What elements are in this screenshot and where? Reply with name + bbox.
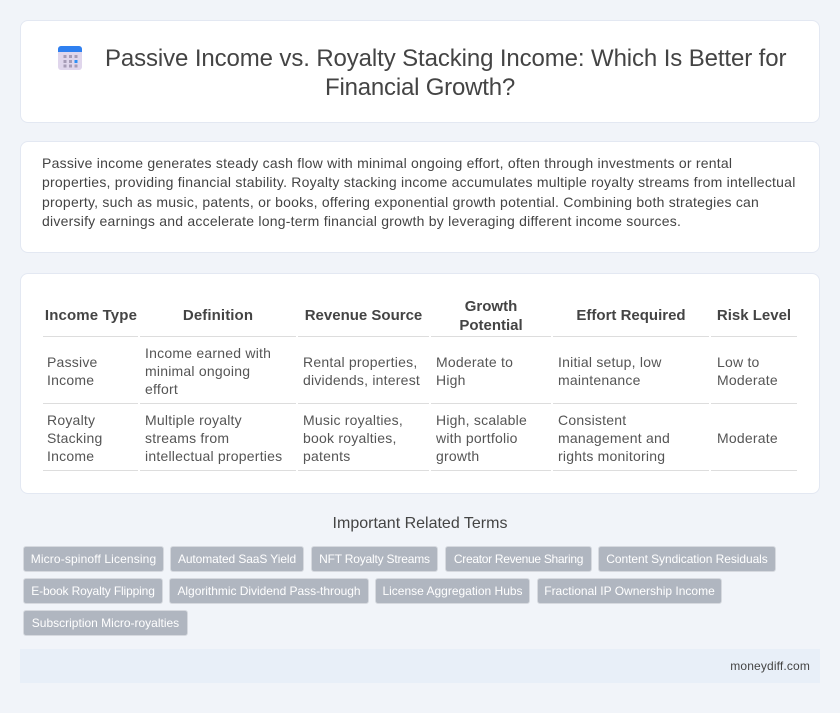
table header: Effort Required	[576, 307, 686, 324]
tag: Subscription Micro-royalties	[32, 616, 179, 630]
intro paragraph: property, such as music, patents, or books, offering exponential growth potential. Combining both strategies can	[42, 194, 759, 210]
row: royalty stacking income: intellectual properties	[145, 448, 282, 464]
row: passive income: Passive	[47, 354, 98, 370]
tag	[598, 546, 776, 572]
tag: Fractional IP Ownership Income	[544, 584, 715, 598]
intro paragraph	[42, 155, 796, 229]
row: royalty stacking income: High, scalable	[436, 412, 527, 428]
row: passive income: Low to	[717, 354, 760, 370]
tag	[23, 578, 163, 604]
row: royalty stacking income: Royalty	[47, 412, 95, 428]
row: royalty stacking income: Music royalties,	[303, 412, 403, 428]
row: passive income: Moderate	[717, 372, 778, 388]
row: royalty stacking income: Income	[47, 448, 94, 464]
intro paragraph: Passive income generates steady cash flow with minimal ongoing effort, often through investments or rental	[42, 155, 732, 171]
footer bar	[20, 649, 820, 683]
row: royalty stacking income: Multiple royalty	[145, 412, 242, 428]
related terms heading: Important Related Terms	[333, 515, 507, 532]
row: passive income: High	[436, 372, 466, 388]
icon: calendar	[58, 46, 82, 70]
tag	[23, 610, 188, 636]
tag	[445, 546, 592, 572]
title: Financial Growth?	[325, 74, 515, 101]
row: royalty stacking income	[47, 412, 778, 464]
row: royalty stacking income: streams from	[145, 430, 229, 446]
title card	[20, 20, 820, 123]
row: royalty stacking income: rights monitoring	[558, 448, 665, 464]
row: passive income: Moderate to	[436, 354, 513, 370]
tag: Creator Revenue Sharing	[454, 552, 583, 566]
tag: License Aggregation Hubs	[382, 584, 523, 598]
title	[105, 45, 786, 101]
tag	[169, 578, 369, 604]
row: passive income: maintenance	[558, 372, 641, 388]
row: royalty stacking income: Stacking	[47, 430, 102, 446]
table header	[45, 298, 791, 334]
row: royalty stacking income: book royalties,	[303, 430, 397, 446]
tag	[23, 546, 164, 572]
table header: Income Type	[45, 307, 137, 324]
row: royalty stacking income: management and	[558, 430, 670, 446]
tag: E-book Royalty Flipping	[31, 584, 155, 598]
tag: Content Syndication Residuals	[606, 552, 768, 566]
row: royalty stacking income: with portfolio	[436, 430, 518, 446]
comparison table card	[20, 273, 820, 494]
row: passive income: effort	[145, 381, 178, 397]
tag: Micro-spinoff Licensing	[31, 552, 156, 566]
intro paragraph: properties, providing financial stability. Royalty stacking income accumulates multiple royalty streams from intellectual	[42, 174, 796, 190]
row: royalty stacking income: Consistent	[558, 412, 626, 428]
row: royalty stacking income: growth	[436, 448, 479, 464]
row: passive income	[47, 345, 778, 397]
table header: Revenue Source	[305, 307, 422, 324]
tag	[537, 578, 722, 604]
row: passive income: dividends, interest	[303, 372, 420, 388]
footer source: moneydiff.com	[730, 659, 810, 673]
title: Passive Income vs. Royalty Stacking Income: Which Is Better for	[105, 45, 786, 72]
tag	[375, 578, 530, 604]
row: royalty stacking income: Moderate	[717, 430, 778, 446]
table header: Growth	[465, 298, 517, 315]
row: passive income: Rental properties,	[303, 354, 417, 370]
table header: Potential	[459, 317, 523, 334]
related terms tags	[23, 546, 776, 636]
tag: Automated SaaS Yield	[178, 552, 296, 566]
row: passive income: Initial setup, low	[558, 354, 662, 370]
tag	[311, 546, 438, 572]
intro text card	[20, 141, 820, 253]
tag	[170, 546, 304, 572]
tag: Algorithmic Dividend Pass-through	[177, 584, 361, 598]
table header: Risk Level	[717, 307, 791, 324]
row: passive income: Income earned with	[145, 345, 271, 361]
tag: NFT Royalty Streams	[319, 552, 430, 566]
intro paragraph: diversify earnings and accelerate long-term financial growth by leveraging different income sources.	[42, 213, 681, 229]
row: royalty stacking income: patents	[303, 448, 350, 464]
table header: Definition	[183, 307, 253, 324]
row: passive income: minimal ongoing	[145, 363, 250, 379]
row: passive income: Income	[47, 372, 94, 388]
